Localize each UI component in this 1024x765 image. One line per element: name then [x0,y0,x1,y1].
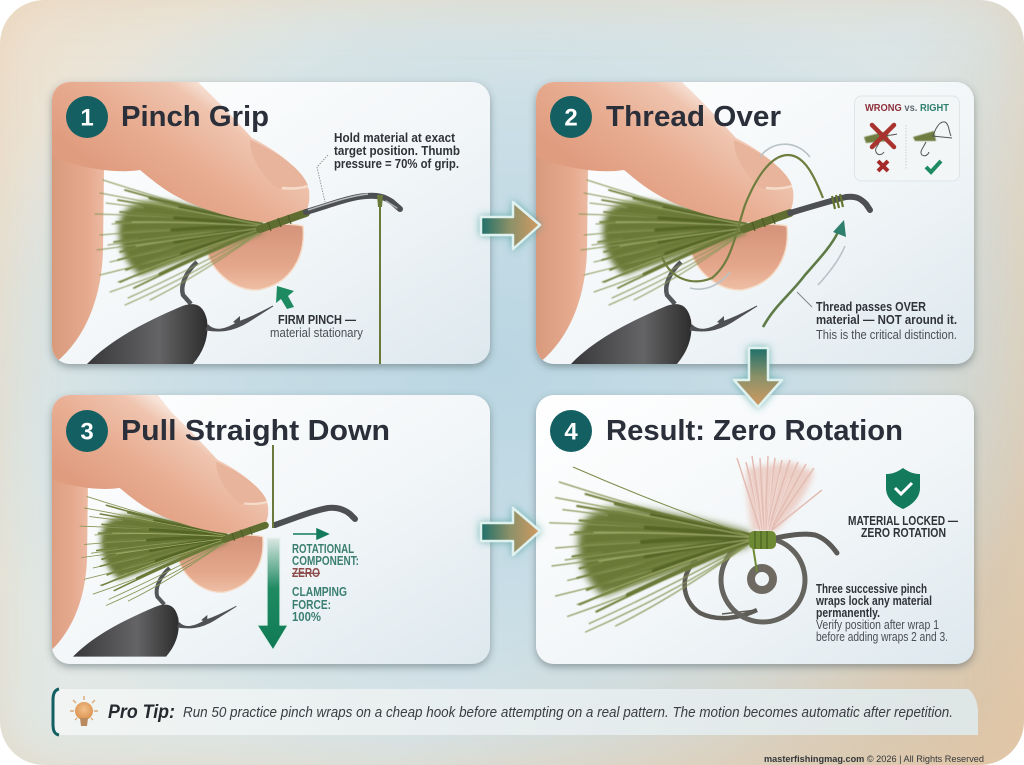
text: three successive wraps: before adding wraps 2 and 3. [816,630,948,644]
panel: pro tip [53,689,978,735]
callout: firm pinch: FIRM PINCH — [278,313,356,327]
step badge 2: 2 [564,104,578,132]
text: three successive wraps: Verify position after wrap 1 [816,618,939,632]
label: material locked: ZERO ROTATION [861,526,946,540]
heading: pinch grip: Pinch Grip [121,101,269,133]
label: rotational component: ZERO [292,566,320,580]
heading: result: Result: Zero Rotation [606,415,903,447]
label: material locked: MATERIAL LOCKED — [848,514,958,528]
callout: thread passes over [797,292,957,342]
label: rotational component: COMPONENT: [292,554,359,568]
callout: hold material: Hold material at exact [334,131,456,145]
panel: step 4 result zero rotation [536,395,974,664]
text: three successive wraps [815,582,948,644]
label: rotational component: ROTATIONAL [292,542,354,556]
step badge 1 [66,96,108,138]
panel: step 1 pinch grip [52,40,490,366]
label: clamping force: CLAMPING [292,585,347,599]
arrow: step 1 to 2 [481,202,540,249]
panel: step 3 pull straight down [42,375,490,664]
panel: step 2 thread over [536,40,974,366]
arrow: step 3 to 4 [481,508,540,555]
illustration: finished fly [550,456,837,632]
callout: hold material: pressure = 70% of grip. [334,157,459,171]
step badge 1: 1 [80,104,94,132]
text: three successive wraps: Three successive pinch [816,582,927,596]
label: clamping force: FORCE: [292,598,331,612]
callout: firm pinch [270,313,364,340]
icon: green pinch arrow [276,286,294,309]
inset: wrong vs right: WRONG vs. RIGHT [865,102,950,114]
step badge 4 [550,410,592,452]
arrow: step 2 to 4 [734,348,782,407]
inset: wrong vs right [854,96,960,181]
icon: light bulb [70,696,98,726]
label: clamping force: 100% [292,610,321,624]
text: three successive wraps: wraps lock any material [815,594,932,608]
step badge 3: 3 [80,418,94,446]
step badge 4: 4 [564,418,578,446]
text: three successive wraps: permanently. [816,606,880,620]
label: rotational component [292,542,359,580]
arrow: rotational [293,529,328,539]
icon: shield check [886,468,920,509]
arrow: clamping force down [257,538,288,650]
step badge 2 [550,96,592,138]
footer credit: masterfishingmag.com © 2026 | All Rights Reserved [764,754,984,765]
callout: firm pinch: material stationary [270,326,364,340]
label: pro tip: Pro Tip: [108,702,175,723]
callout: thread passes over: Thread passes OVER [816,300,926,314]
callout: hold material [317,131,460,202]
step badge 3 [66,410,108,452]
label: material locked [848,514,958,540]
heading: pull straight down: Pull Straight Down [121,415,390,447]
label: clamping force [292,585,347,624]
heading: thread over: Thread Over [606,101,781,133]
callout: hold material: target position. Thumb [334,144,460,158]
callout: thread passes over: material — NOT around it. [816,313,957,327]
text: pro tip body: Run 50 practice pinch wraps on a cheap hook before attempting on a real pattern. The motion becomes automatic after repetition. [183,705,953,721]
callout: thread passes over: This is the critical distinction. [816,328,957,342]
